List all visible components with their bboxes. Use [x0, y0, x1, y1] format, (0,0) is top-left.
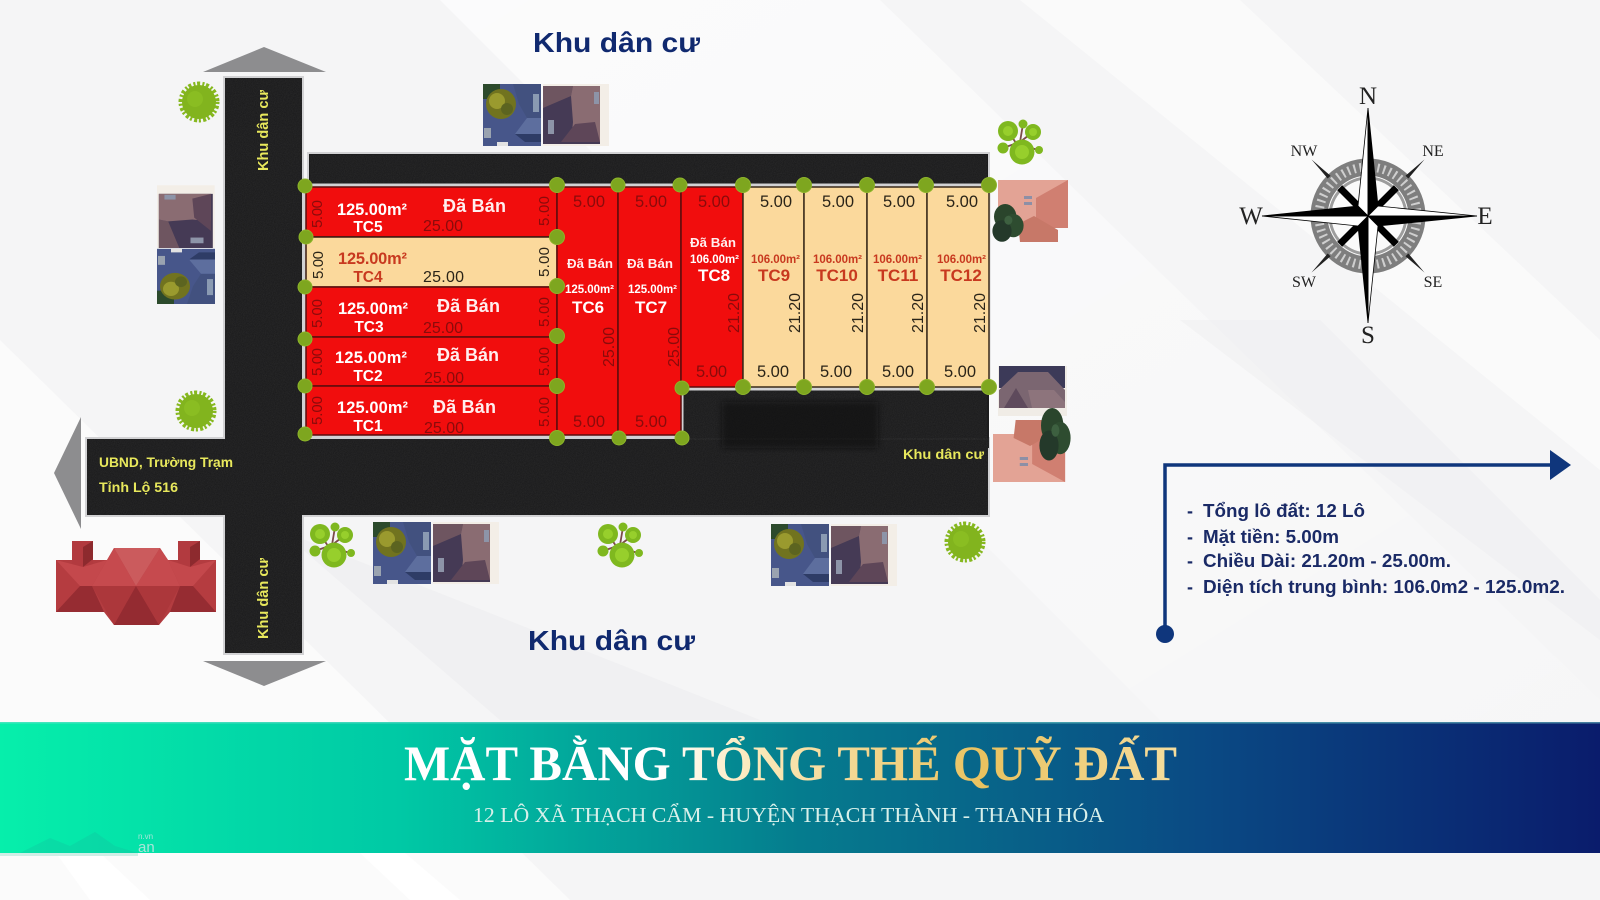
lot TC12: 5.00 [944, 363, 976, 381]
lot TC9: 106.00m² [751, 254, 800, 266]
compass letters: SW [1292, 274, 1317, 291]
lot TC7: Đã Bán [627, 256, 673, 271]
banner subtitle: 12 LÔ XÃ THẠCH CẨM - HUYỆN THẠCH THÀNH - THANH HÓA [473, 803, 1105, 827]
lot TC7: 5.00 [635, 413, 667, 431]
house right middle [998, 366, 1067, 416]
lot TC10: 5.00 [820, 363, 852, 381]
lot TC4: TC4 [353, 269, 383, 286]
lot TC7: 5.00 [635, 193, 667, 211]
arrow: south road [203, 661, 326, 686]
lot TC2: 125.00m² [335, 349, 408, 367]
info text block: Tổng lô đất: 12 Lô [1203, 501, 1365, 521]
road label Tỉnh Lộ 516: Tỉnh Lộ 516 [99, 480, 179, 495]
lot TC12 [927, 187, 989, 387]
title banner [0, 722, 1600, 853]
lot TC8: TC8 [698, 266, 730, 285]
house right lower [993, 408, 1071, 482]
lot TC8: 5.00 [696, 363, 727, 381]
lot TC11 [867, 187, 927, 387]
compass letters: S [1361, 322, 1375, 349]
land lots [298, 178, 996, 446]
compass letters: N [1359, 83, 1377, 110]
compass ring [1319, 167, 1417, 265]
lot TC5: 125.00m² [337, 201, 408, 219]
lot TC2 [306, 337, 557, 387]
lot TC11: 106.00m² [873, 254, 922, 266]
arrow: north road [203, 47, 326, 72]
lot TC10 [804, 187, 867, 387]
lot TC4: 5.00 [536, 247, 553, 277]
lot TC8: 106.00m² [690, 254, 739, 266]
lot TC10: 106.00m² [813, 254, 862, 266]
banner title: MẶT BẰNG TỔNG THẾ QUỸ ĐẤT [404, 734, 1177, 791]
lot TC6: 25.00 [601, 327, 618, 367]
lot TC2: TC2 [353, 368, 383, 385]
watermark: an [138, 839, 155, 856]
lot TC9: TC9 [758, 266, 790, 285]
lot TC3 [306, 287, 557, 337]
lot TC6: TC6 [572, 298, 604, 317]
lot TC1 [306, 386, 557, 437]
info text block: Diện tích trung bình: 106.0m2 - 125.0m2. [1203, 577, 1565, 597]
info text block: - [1187, 551, 1193, 571]
lot TC11: 5.00 [882, 363, 914, 381]
lot TC3: Đã Bán [437, 296, 500, 316]
lot TC6 [557, 187, 618, 435]
lot TC8: 5.00 [698, 193, 730, 211]
compass rose [1239, 83, 1493, 349]
icon: branch tree bottom centre [598, 522, 643, 568]
icon: branch tree top right [998, 120, 1043, 164]
lot TC12: 21.20 [972, 293, 989, 333]
info text block: Chiều Dài: 21.20m - 25.00m. [1203, 551, 1451, 571]
compass letters: NE [1422, 143, 1444, 160]
lot TC9: 21.20 [787, 293, 804, 333]
lot TC2: Đã Bán [437, 345, 499, 365]
lot TC10: 5.00 [822, 193, 854, 211]
lot TC11: 5.00 [883, 193, 915, 211]
road network [80, 70, 995, 660]
road label east: Khu dân cư [903, 446, 985, 462]
lot TC7 [618, 187, 683, 435]
compass letters: NW [1291, 143, 1318, 160]
lot TC1: 25.00 [424, 420, 464, 437]
lot TC5: 5.00 [536, 196, 553, 226]
lot TC4: 125.00m² [338, 250, 408, 268]
lot TC1: 5.00 [309, 396, 326, 425]
lot TC9: 5.00 [760, 193, 792, 211]
lot TC5: TC5 [353, 219, 383, 236]
houses bottom right [771, 524, 897, 586]
lot TC1: 125.00m² [337, 399, 409, 417]
lot TC9: 5.00 [757, 363, 789, 381]
lot TC3: 25.00 [423, 320, 463, 337]
trees [178, 84, 1043, 568]
lot TC8: Đã Bán [690, 235, 736, 250]
watermark [0, 832, 155, 856]
lot TC12: 106.00m² [937, 254, 986, 266]
compass letters: SE [1424, 274, 1442, 291]
lot TC2: 25.00 [424, 370, 464, 387]
lot TC3: TC3 [354, 319, 384, 336]
lot TC3: 5.00 [309, 299, 326, 328]
lot corner markers [298, 178, 996, 446]
icon: branch tree bottom left [310, 522, 355, 568]
lot TC7: 25.00 [666, 327, 683, 367]
lot TC2: 5.00 [536, 347, 553, 376]
lot TC8 [681, 187, 743, 387]
lot TC3: 5.00 [536, 297, 553, 327]
info bracket arrow [1156, 450, 1571, 643]
lot TC5: Đã Bán [443, 196, 506, 216]
houses bottom left [373, 522, 499, 584]
house right upper [992, 180, 1068, 242]
road label UBND: UBND, Trường Trạm [99, 455, 233, 470]
lot TC1: 5.00 [536, 397, 553, 427]
info text block: - [1187, 527, 1193, 547]
lot TC1: TC1 [353, 418, 383, 435]
icon: bush upper left [181, 84, 217, 120]
lot TC11: 21.20 [910, 293, 927, 333]
houses top [483, 84, 609, 146]
lot TC12: TC12 [940, 266, 982, 285]
icon: bush lower left [178, 393, 214, 429]
lot TC9 [743, 187, 804, 387]
lot TC4: 25.00 [423, 269, 464, 286]
lot TC11: TC11 [878, 266, 918, 285]
info text block [1187, 501, 1565, 597]
red house [56, 541, 216, 625]
lot TC10: 21.20 [850, 293, 867, 333]
icon: bush bottom right [947, 524, 983, 560]
lot TC6: 5.00 [573, 413, 605, 431]
lot TC7: 125.00m² [628, 284, 677, 296]
lot TC2: 5.00 [309, 348, 326, 376]
lot TC5 [306, 187, 557, 237]
lot frame [305, 185, 989, 436]
compass star [1262, 108, 1477, 323]
lot TC1: Đã Bán [433, 397, 496, 417]
lot TC6: 5.00 [573, 193, 605, 211]
lot TC3: 125.00m² [338, 300, 409, 318]
compass letters: W [1239, 203, 1263, 230]
arrow: west road [54, 417, 81, 529]
compass letters: E [1477, 203, 1493, 230]
road label south: Khu dân cư [256, 558, 272, 639]
heading: Khu dân cư top: Khu dân cư [533, 27, 701, 58]
lot TC8: 21.20 [726, 293, 743, 333]
road label north: Khu dân cư [256, 90, 272, 171]
lot TC5: 5.00 [309, 200, 326, 228]
compass letters [1239, 83, 1493, 349]
lot TC6: Đã Bán [567, 256, 613, 271]
info text block: - [1187, 501, 1193, 521]
lot TC6: 125.00m² [565, 284, 614, 296]
lot TC4: 5.00 [310, 251, 327, 279]
compass diagonals [1309, 157, 1427, 275]
watermark: n.vn [138, 832, 153, 841]
lot TC7: TC7 [635, 298, 667, 317]
lot TC10: TC10 [816, 266, 858, 285]
lot TC5: 25.00 [423, 218, 463, 235]
heading: Khu dân cư bottom: Khu dân cư [528, 625, 696, 656]
info text block: - [1187, 577, 1193, 597]
lot TC12: 5.00 [946, 193, 978, 211]
lot TC4 [306, 237, 557, 287]
houses left [157, 185, 215, 304]
info text block: Mặt tiền: 5.00m [1203, 527, 1339, 547]
